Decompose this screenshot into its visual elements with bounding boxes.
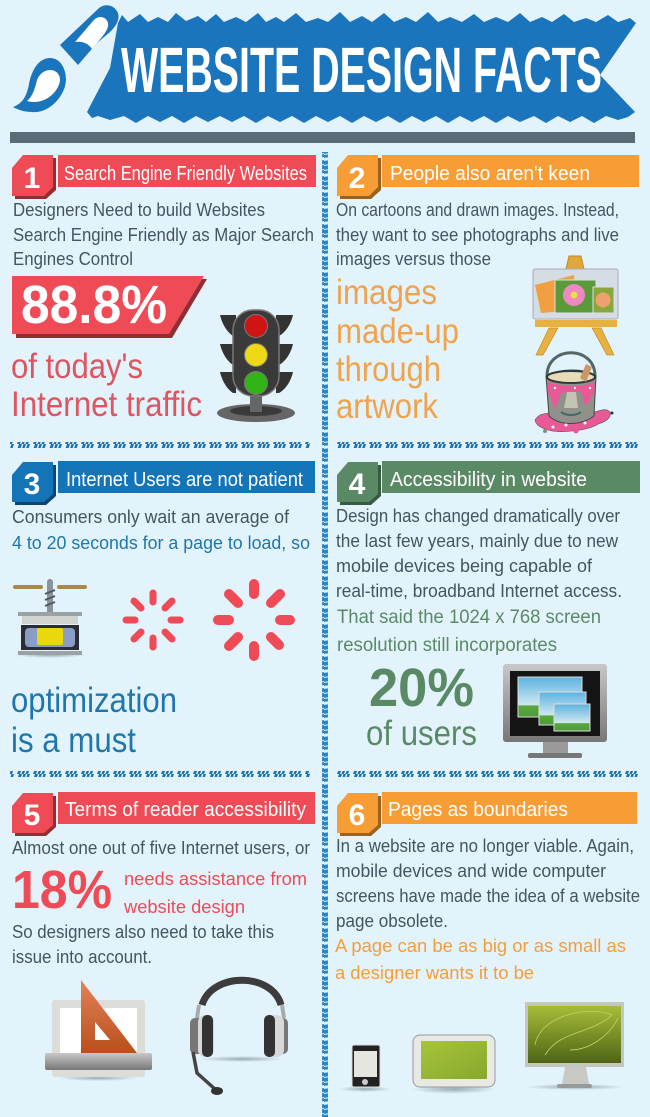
stat caption: of today's [11, 347, 143, 386]
panel: 6 pages as boundaries [335, 792, 640, 1094]
badge 3: 3 [24, 468, 40, 501]
body text 1 [13, 200, 314, 269]
orange statement: made-up [336, 312, 459, 351]
body text 1: Search Engine Friendly as Major Search [13, 225, 314, 245]
blue statement: is a must [11, 721, 136, 760]
body text 4: real-time, broadband Internet access. [336, 581, 622, 601]
green statement: That said the 1024 x 768 screen [337, 607, 601, 628]
header 2 [382, 155, 639, 187]
badge 5 [12, 793, 56, 836]
badge 3 [12, 462, 56, 505]
header 3 [58, 461, 315, 493]
badge 1 [12, 155, 56, 199]
body text 3 [12, 507, 310, 553]
icon: headset [190, 980, 288, 1095]
header 3: Internet Users are not patient [66, 469, 303, 491]
icon: monitor with resized images [503, 664, 607, 758]
orange statement: artwork [336, 387, 438, 426]
body text 1: Engines Control [13, 249, 133, 269]
header 5 [58, 792, 315, 824]
body text 6 [336, 836, 640, 931]
stat caption: website design [123, 897, 245, 917]
icon: traffic light [217, 310, 295, 422]
orange statement: a designer wants it to be [335, 963, 534, 983]
panel: 3 internet users are not patient [11, 461, 315, 760]
stat caption [11, 347, 202, 424]
badge 1: 1 [24, 162, 40, 195]
header 2: People also aren't keen [390, 163, 590, 185]
orange statement: through [336, 350, 441, 389]
icon: large loading spinner [218, 584, 290, 656]
stat: 20% of users [366, 658, 477, 753]
stat: 20% of users: 20% [369, 658, 474, 718]
header 1: Search Engine Friendly Websites [64, 163, 307, 185]
body text 5: Almost one out of five Internet users, or [12, 838, 310, 858]
body text 2 [336, 200, 619, 269]
title banner [87, 12, 636, 123]
body text 4 [336, 506, 622, 601]
body text 4: the last few years, mainly due to new [336, 531, 619, 551]
icon: tablet [412, 1035, 496, 1094]
stat: 18%: 18% [12, 860, 112, 920]
icon: easel with photos [533, 256, 618, 355]
icon: compression press [13, 579, 87, 658]
stat caption [123, 869, 307, 917]
body text 4: mobile devices being capable of [336, 556, 593, 576]
badge 4: 4 [349, 468, 366, 501]
body text 6: page obsolete. [336, 911, 448, 931]
stat: 88.8%: 88.8% [21, 275, 167, 335]
icon: desktop monitor [525, 1002, 625, 1090]
green statement: resolution still incorporates [337, 635, 557, 656]
badge 4 [337, 462, 381, 505]
header 1 [58, 155, 316, 187]
icon: laptop with set square and ruler [45, 980, 152, 1081]
green statement [337, 607, 601, 656]
panel: 5 terms of reader accessibility [12, 792, 315, 1095]
header 4: Accessibility in website [390, 469, 587, 491]
closing text 5: So designers also need to take this [12, 922, 274, 942]
body text 2: images versus those [336, 249, 491, 269]
body text 3: 4 to 20 seconds for a page to load, so [12, 533, 310, 553]
stat caption: needs assistance from [124, 869, 307, 889]
badge 6 [337, 793, 381, 836]
icon: paintbrush [13, 5, 119, 112]
stat: 20% of users: of users [366, 714, 477, 753]
blue statement [11, 681, 177, 760]
blue statement: optimization [11, 681, 177, 720]
closing text 5 [12, 922, 274, 967]
panel: 1 search engine friendly [11, 155, 316, 424]
icon: phone [339, 1045, 391, 1092]
closing text 5: issue into account. [12, 947, 152, 967]
icon: paint bucket face [535, 353, 614, 434]
body text 3: Consumers only wait an average of [12, 507, 290, 527]
icon: small loading spinner [126, 593, 180, 647]
body text 6: mobile devices and wide computer [336, 861, 606, 881]
orange statement: A page can be as big or as small as [335, 936, 626, 956]
badge 5: 5 [24, 799, 40, 832]
body text 2: they want to see photographs and live [336, 225, 619, 245]
header 5: Terms of reader accessibility [65, 799, 306, 821]
badge 6: 6 [349, 799, 365, 832]
body text 1: Designers Need to build Websites [13, 200, 265, 220]
header 4 [382, 461, 640, 493]
orange statement: images [336, 273, 437, 312]
header 6 [382, 792, 637, 824]
badge 2: 2 [349, 162, 365, 195]
panel: 4 accessibility in website [336, 461, 640, 758]
body text 4: Design has changed dramatically over [336, 506, 620, 526]
stat caption: Internet traffic [11, 385, 202, 424]
orange statement [335, 936, 626, 983]
orange statement [336, 273, 459, 426]
badge 2 [337, 155, 381, 199]
header 6: Pages as boundaries [388, 799, 568, 821]
body text 6: In a website are no longer viable. Again, [336, 836, 634, 856]
panel: 2 people also aren't keen [336, 155, 639, 434]
